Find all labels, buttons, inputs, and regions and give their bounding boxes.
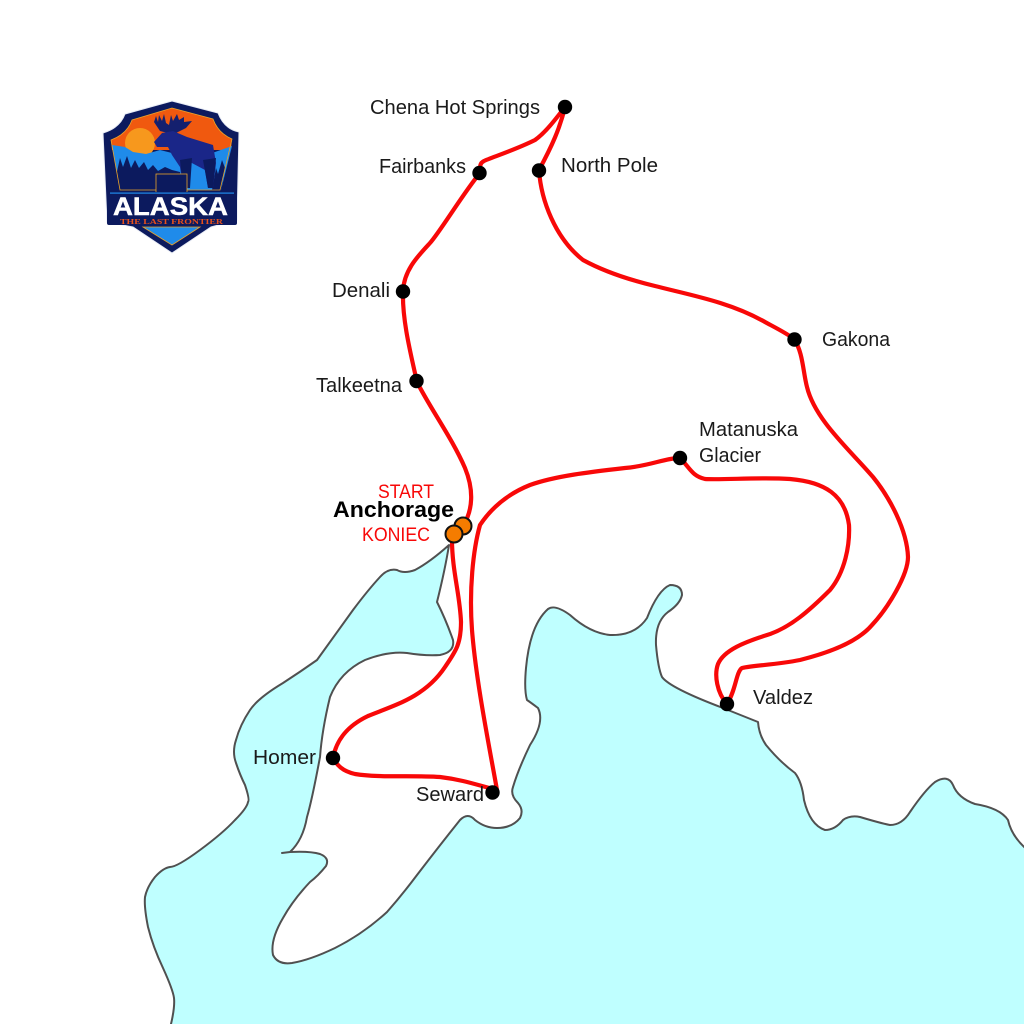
stop: Anchorage start and end: Anchorage	[333, 497, 454, 522]
route: red travel line	[333, 107, 908, 790]
stop: Matanuska Glacier: Glacier	[699, 445, 761, 467]
stop: Denali: Denali	[332, 280, 390, 302]
map: sea and coastline	[145, 545, 1024, 1024]
badge banner line	[110, 192, 234, 194]
badge frame	[111, 108, 232, 190]
stop: Homer	[253, 747, 340, 769]
moose body	[154, 131, 216, 188]
stop: Anchorage start and end: START	[378, 482, 434, 503]
badge sun	[125, 128, 155, 158]
badge trees	[116, 156, 225, 190]
stop: Matanuska Glacier	[673, 419, 799, 467]
stop: Gakona	[787, 329, 891, 351]
stop: Anchorage start and end	[333, 482, 472, 546]
badge moose	[154, 114, 216, 188]
stop: Anchorage start and end: KONIEC	[362, 525, 430, 546]
badge: Alaska The Last Frontier	[103, 101, 239, 253]
badge mountains	[112, 145, 232, 190]
stop: Chena Hot Springs: Chena Hot Springs	[370, 97, 540, 119]
stop: North Pole: North Pole	[561, 155, 658, 177]
badge title: ALASKA	[113, 193, 228, 221]
moose antlers	[154, 114, 192, 133]
stop: Gakona: Gakona	[822, 329, 891, 351]
stop: Seward: Seward	[416, 784, 484, 806]
badge shield	[103, 101, 239, 253]
badge banner	[107, 192, 237, 225]
stop: Matanuska Glacier: Matanuska	[699, 419, 799, 441]
stop: Fairbanks: Fairbanks	[379, 156, 466, 178]
stop: Valdez	[720, 687, 813, 711]
stop: Valdez: Valdez	[753, 687, 813, 709]
badge sky	[111, 108, 232, 150]
badge state box	[156, 174, 187, 193]
moose legs shadow	[180, 158, 216, 188]
badge subtitle: THE LAST FRONTIER	[120, 217, 224, 226]
badge lower emblem	[143, 227, 200, 245]
stop: Talkeetna: Talkeetna	[316, 375, 403, 397]
stop: Homer: Homer	[253, 747, 316, 769]
